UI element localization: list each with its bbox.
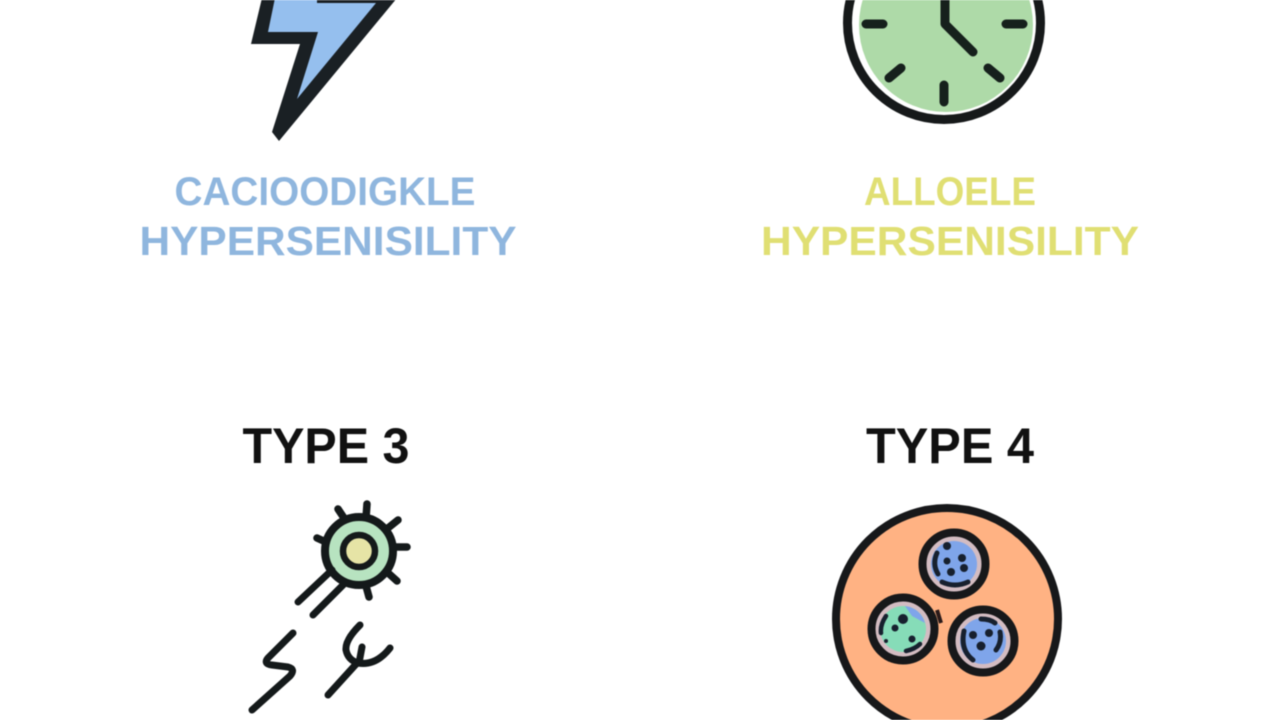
squiggle <box>252 633 293 710</box>
heading: allergic hypersensitivity: HYPERSENISILITY <box>761 218 1139 264</box>
top cell <box>922 532 986 596</box>
heading: type 3: TYPE 3 <box>242 418 410 474</box>
heading: type 4: TYPE 4 <box>866 418 1034 474</box>
cell with spikes <box>317 504 407 597</box>
left cell <box>872 598 941 660</box>
heading: cardiotoxic hypersensitivity: CACIOODIGKLE <box>174 170 476 214</box>
icon: clock <box>848 0 1040 120</box>
heading: cardiotoxic hypersensitivity <box>140 170 516 264</box>
icon: lightning bolt <box>251 0 397 141</box>
heading: allergic hypersensitivity: ALLOELE <box>864 170 1036 214</box>
icon: type 4 cluster of cells <box>836 508 1058 720</box>
right cell <box>952 610 1014 672</box>
icon: type 3 immune cell and antibodies <box>252 504 407 710</box>
heading: cardiotoxic hypersensitivity: HYPERSENISILITY <box>140 218 516 264</box>
heading: allergic hypersensitivity <box>761 170 1139 264</box>
fork <box>328 625 390 695</box>
antibody lines <box>298 570 345 615</box>
